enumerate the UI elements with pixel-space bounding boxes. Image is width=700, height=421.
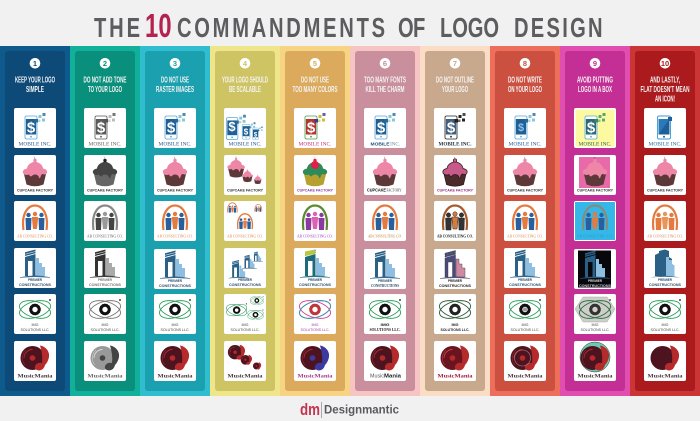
- panel: commandment 1, keep your logo simple: 1: [33, 59, 37, 68]
- logo card: construction: PREMIER: [448, 279, 462, 283]
- logo card: flat img solutions: [644, 294, 686, 334]
- logo card: consulting: AB CONSULTING CO.: [437, 234, 473, 238]
- logo card: mobile: MOBILE: [370, 142, 390, 148]
- logo card: construction in three sizes: CONSTRUCTIONS: [229, 283, 262, 287]
- panel: commandment 9, avoid putting logo in a box: [560, 46, 630, 396]
- logo card: mobile in yellow box: [574, 108, 616, 148]
- logo card: cupcake: [154, 155, 196, 195]
- logo card: construction: [364, 249, 406, 289]
- heading: KEEP YOUR LOGO: [15, 74, 55, 84]
- logo card: consulting in blue box: [574, 201, 616, 241]
- heading: AVOID PUTTING: [577, 74, 613, 84]
- heading: DO NOT ADD TONE: [84, 74, 127, 84]
- logo card: img solutions: [154, 294, 196, 334]
- logo card: mobile: [434, 108, 476, 148]
- logo card: construction: [84, 248, 126, 288]
- heading: TO YOUR LOGO: [88, 84, 122, 94]
- logo card: cupcake: [434, 155, 476, 195]
- heading: LOGO IN A BOX: [578, 84, 612, 94]
- logo card: music: MusicMania: [298, 374, 333, 380]
- logo card: mobile in yellow box: $: [587, 120, 596, 136]
- logo card: consulting: AB CONSULTING CO.: [367, 234, 402, 238]
- logo card: img solutions in three sizes: [224, 294, 266, 334]
- logo card: construction: PREMIER: [518, 278, 532, 282]
- logo card: img solutions: SOLUTIONS LLC.: [440, 328, 470, 332]
- logo card: mobile: MOBILE INC.: [18, 142, 52, 148]
- heading: [292, 74, 338, 94]
- logo card: construction: [14, 248, 56, 288]
- logo card: cupcake: FACTORY: [386, 188, 402, 192]
- logo card: cupcake in three sizes: CUPCAKE FACTORY: [227, 188, 263, 192]
- logo card: img solutions: SOLUTIONS LLC.: [300, 327, 330, 332]
- logo card: consulting: [434, 201, 476, 241]
- logo card: consulting: [364, 201, 406, 241]
- logo card: consulting: AB CONSULTING CO.: [507, 234, 543, 238]
- logo card: cupcake: CUPCAKE FACTORY: [507, 188, 543, 192]
- logo card: music: Mania: [384, 374, 402, 380]
- heading: SIMPLE: [26, 84, 44, 94]
- logo card: music: [84, 341, 126, 381]
- logo card: flat construction: [644, 248, 686, 288]
- heading: YOUR LOGO SHOULD: [222, 74, 268, 84]
- heading: [15, 74, 55, 94]
- logo card: construction: CONSTRUCTIONS: [299, 283, 332, 287]
- title: LOGO: [440, 13, 499, 44]
- logo card: consulting: AB CONSULTING CO.: [17, 234, 53, 238]
- logo card: cupcake: CUPCAKE FACTORY: [437, 188, 473, 192]
- logo card: consulting: [14, 201, 56, 241]
- logo card: construction: PREMIER: [308, 278, 322, 282]
- footer brand: Designmantic: [300, 400, 399, 419]
- heading: [364, 74, 406, 94]
- logo card: cupcake: [294, 155, 336, 195]
- logo card: img solutions: IMG: [102, 322, 108, 327]
- logo card: mobile in three sizes: $: [244, 128, 249, 136]
- logo card: music: MusicMania: [438, 374, 473, 380]
- logo card: consulting: [154, 201, 196, 241]
- logo card: cupcake: CUPCAKE FACTORY: [157, 188, 193, 192]
- logo card: img solutions: IMG: [452, 323, 459, 327]
- logo card: mobile: $: [447, 120, 456, 136]
- title: THE: [94, 13, 140, 44]
- logo card: flat cupcake: [644, 155, 686, 195]
- logo card: flat music: [644, 341, 686, 381]
- panel: commandment 7, do not outline your logo: [420, 46, 490, 396]
- logo card: construction: CONSTRUCTIONS: [159, 284, 192, 288]
- logo card: mobile in three sizes: [224, 108, 266, 148]
- logo card: mobile in three sizes: $: [254, 132, 258, 138]
- logo card: mobile: $: [307, 120, 316, 136]
- logo card: cupcake: CUPCAKE FACTORY: [297, 188, 333, 192]
- logo card: mobile in yellow box: MOBILE INC.: [578, 142, 612, 148]
- logo card: cupcake in pink box: CUPCAKE FACTORY: [577, 188, 613, 192]
- panel: commandment 1, keep your logo simple: [0, 46, 70, 396]
- heading: BE SCALABLE: [229, 84, 261, 94]
- logo card: construction in black box: CONSTRUCTIONS: [579, 284, 612, 288]
- logo card: mobile: INC.: [390, 142, 400, 148]
- logo card: music: MusicMania: [18, 374, 53, 380]
- logo card: img solutions in grey hexagon: IMG: [592, 322, 598, 327]
- logo card: music: [504, 341, 546, 381]
- logo card: img solutions: [364, 294, 406, 334]
- logo card: cupcake: [14, 155, 56, 195]
- panel: commandment 10, and lastly, flat does not mean an icon: [630, 46, 700, 396]
- heading: DO NOT USE: [301, 74, 329, 84]
- logo card: flat construction: PREMIER: [658, 278, 672, 282]
- logo card: music: [154, 341, 196, 381]
- heading: [84, 74, 127, 94]
- logo card: img solutions: [84, 294, 126, 334]
- logo card: mobile: $: [518, 122, 524, 134]
- logo card: construction: CONSTRUCTIONS: [439, 284, 472, 288]
- logo card: mobile: [294, 108, 336, 148]
- logo card: img solutions in three sizes: SOLUTIONS LLC.: [230, 327, 260, 332]
- logo card: mobile: MOBILE INC.: [508, 142, 542, 148]
- logo card: music: [434, 341, 476, 381]
- panel: commandment 8, do not write on your logo: 8: [523, 59, 527, 68]
- logo card: music in teal circle: MusicMania: [578, 374, 613, 380]
- logo card: img solutions: SOLUTIONS LLC.: [370, 328, 401, 332]
- logo card: mobile: MOBILE INC.: [298, 142, 332, 148]
- logo card: music: MusicMania: [88, 374, 123, 380]
- logo card: img solutions: [294, 294, 336, 334]
- logo card: music: [364, 341, 406, 381]
- footer brand: Designmantic: Designmantic: [324, 402, 399, 416]
- title: COMMANDMENTS: [177, 13, 385, 44]
- logo card: img solutions: SOLUTIONS LLC.: [510, 327, 540, 332]
- heading: DO NOT WRITE: [508, 74, 542, 84]
- logo card: consulting: [504, 201, 546, 241]
- heading: RASTER IMAGES: [156, 84, 194, 94]
- logo card: construction: CONSTRUCTIONS: [89, 283, 122, 287]
- logo card: consulting in three sizes: [224, 201, 266, 241]
- logo card: mobile in three sizes: MOBILE INC.: [228, 142, 262, 148]
- logo card: construction in black box: [574, 249, 616, 289]
- panel: commandment 7, do not outline your logo: 7: [453, 59, 457, 68]
- panel: commandment 6, too many fonts kill the charm: [350, 46, 420, 396]
- panel: commandment 3, do not use raster images: [140, 46, 210, 396]
- logo card: mobile: MOBILE INC.: [88, 142, 122, 148]
- logo card: construction: PREMIER: [168, 279, 182, 283]
- panel: commandment 5, do not use too many colors: [280, 46, 350, 396]
- logo card: consulting: AB CONSULTING CO.: [87, 234, 123, 238]
- logo card: cupcake: CUPCAKE FACTORY: [87, 188, 123, 192]
- panel: commandment 3, do not use raster images: 3: [173, 59, 177, 68]
- logo card: music in three sizes: [224, 341, 266, 381]
- logo card: cupcake in pink box: [574, 155, 616, 195]
- panel: commandment 8, do not write on your logo: [490, 46, 560, 396]
- logo card: cupcake: CUPCAKE FACTORY: [17, 188, 53, 192]
- logo card: consulting: [84, 201, 126, 241]
- logo card: construction: PREMIER: [98, 278, 112, 282]
- logo card: mobile: [14, 108, 56, 148]
- logo card: flat mobile: [644, 108, 686, 148]
- logo card: img solutions: IMG: [312, 322, 318, 327]
- logo card: consulting: AB CONSULTING CO.: [297, 234, 333, 238]
- logo card: img solutions: IMG: [32, 322, 38, 327]
- logo card: music: Music: [370, 374, 384, 380]
- logo card: construction in three sizes: PREMIER: [238, 278, 252, 282]
- panel: commandment 9, avoid putting logo in a box: 9: [593, 59, 597, 68]
- panel: commandment 2, do not add tone to your logo: [70, 46, 140, 396]
- panel: commandment 5, do not use too many colors: 5: [313, 59, 317, 68]
- heading: KILL THE CHARM: [366, 84, 404, 94]
- logo card: consulting: [294, 201, 336, 241]
- logo card: img solutions: [434, 294, 476, 334]
- logo card: music in teal circle: [574, 341, 616, 381]
- heading: TOO MANY FONTS: [364, 74, 406, 84]
- logo card: cupcake in three sizes: [224, 155, 266, 195]
- logo card: music: MusicMania: [508, 374, 543, 380]
- logo card: flat consulting: AB CONSULTING CO.: [647, 234, 683, 238]
- logo card: mobile: $: [97, 120, 106, 136]
- logo card: construction: CONSTRUCTIONS: [19, 283, 52, 287]
- heading: AN ICON!: [655, 93, 675, 103]
- logo card: mobile in three sizes: $: [228, 119, 236, 134]
- logo card: construction: [294, 248, 336, 288]
- logo card: mobile: $: [27, 120, 36, 136]
- heading: [436, 74, 474, 94]
- title: 10: [145, 8, 172, 45]
- logo card: img solutions: IMG: [172, 322, 178, 327]
- logo card: music: [14, 341, 56, 381]
- logo card: construction: PREMIER: [378, 279, 392, 283]
- logo card: music: [294, 341, 336, 381]
- logo card: img solutions: [504, 294, 546, 334]
- heading: [156, 74, 194, 94]
- logo card: construction: PREMIER: [28, 278, 42, 282]
- title: DESIGN: [514, 13, 603, 44]
- logo card: consulting: AB CONSULTING CO.: [157, 234, 193, 238]
- heading: [577, 74, 613, 94]
- panel: commandment 4, your logo should be scalable: 4: [243, 59, 248, 68]
- heading: DO NOT OUTLINE: [436, 74, 474, 84]
- logo card: construction in black box: PREMIER: [588, 279, 602, 283]
- logo card: mobile: $: [377, 120, 386, 136]
- logo card: img solutions: SOLUTIONS LLC.: [90, 327, 120, 332]
- logo card: flat music: MusicMania: [648, 374, 683, 380]
- title: [94, 8, 603, 45]
- heading: [508, 74, 542, 94]
- logo card: mobile: [504, 108, 546, 148]
- logo card: construction: CONSTRUCTIONS: [371, 284, 399, 288]
- logo card: mobile: MOBILE INC.: [158, 142, 192, 148]
- panel: commandment 2, do not add tone to your logo: 2: [103, 59, 107, 68]
- logo card: flat mobile: MOBILE INC.: [648, 142, 682, 148]
- title: OF: [398, 13, 425, 44]
- panel: commandment 10, and lastly, flat does not mean an icon: 10: [661, 59, 669, 68]
- logo card: construction: [504, 248, 546, 288]
- logo card: img solutions: IMG: [522, 322, 528, 327]
- logo card: music: MusicMania: [158, 374, 193, 380]
- logo card: img solutions: SOLUTIONS LLC.: [160, 327, 190, 332]
- logo card: mobile: [364, 108, 406, 148]
- logo card: img solutions: SOLUTIONS LLC.: [20, 327, 50, 332]
- logo card: mobile: [84, 108, 126, 148]
- logo card: construction: CONSTRUCTIONS: [509, 283, 542, 287]
- logo card: img solutions: [14, 294, 56, 334]
- heading: DO NOT USE: [161, 74, 189, 84]
- logo card: construction: [154, 249, 196, 289]
- footer brand: Designmantic: dm: [300, 400, 320, 419]
- panel: commandment 6, too many fonts kill the charm: 6: [383, 59, 387, 68]
- heading: TOO MANY COLORS: [292, 84, 338, 94]
- logo card: flat construction: CONSTRUCTIONS: [649, 283, 682, 287]
- logo card: mobile: [154, 108, 196, 148]
- panel: commandment 4, your logo should be scalable: [210, 46, 280, 396]
- heading: YOUR LOGO: [442, 84, 468, 94]
- logo card: img solutions: IMG: [380, 323, 390, 327]
- logo card: img solutions in three sizes: IMG: [242, 322, 248, 327]
- heading: [222, 74, 268, 94]
- logo card: cupcake: CUPCAKE: [367, 188, 386, 192]
- logo card: cupcake: [504, 155, 546, 195]
- logo card: music in three sizes: MusicMania: [228, 374, 263, 380]
- logo card: cupcake: [84, 155, 126, 195]
- logo card: flat img solutions: SOLUTIONS LLC.: [650, 327, 680, 332]
- heading: ON YOUR LOGO: [508, 84, 542, 94]
- logo card: flat cupcake: CUPCAKE FACTORY: [647, 188, 683, 192]
- logo card: consulting in three sizes: AB CONSULTING CO.: [227, 234, 263, 238]
- logo card: mobile: $: [167, 120, 176, 136]
- logo card: construction: [434, 249, 476, 289]
- logo card: img solutions in grey hexagon: SOLUTIONS LLC.: [580, 327, 610, 332]
- logo card: cupcake: [364, 155, 406, 195]
- logo card: mobile: MOBILE INC.: [438, 142, 472, 148]
- logo card: consulting in blue box: AB CONSULTING CO.: [577, 234, 613, 238]
- logo card: img solutions in grey hexagon: [574, 294, 616, 334]
- logo card: flat img solutions: IMG: [662, 322, 668, 327]
- heading: [640, 74, 690, 103]
- logo card: construction in three sizes: [224, 248, 266, 288]
- logo card: flat consulting: [644, 201, 686, 241]
